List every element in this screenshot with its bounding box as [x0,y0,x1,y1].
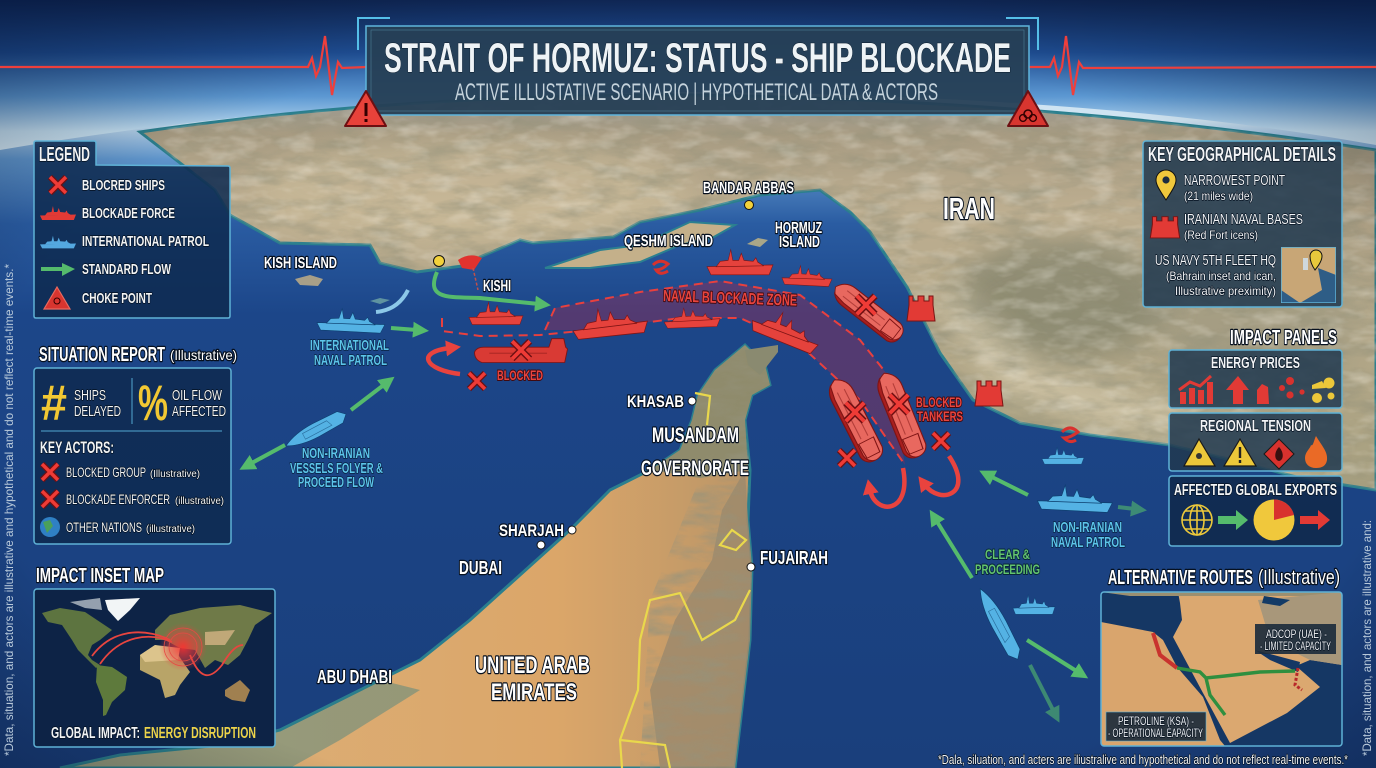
yellow borders [620,393,750,768]
panel: alternative routes inset map [1101,592,1342,746]
icon: warning triangle [345,91,386,126]
footnote: right vertical: *Data, situation, and actors are illustrative and: [1360,520,1374,756]
icon: flame [1305,436,1327,468]
heading: legend: LEGEND [39,144,90,166]
place labels: ABU DHABI [317,667,392,687]
legend: blockade force [40,205,175,222]
icon: red arrow [1300,510,1330,530]
panel: situation report [34,368,231,544]
icon: network [1279,377,1305,399]
place labels: GOVERNORATE [641,457,749,480]
legend: standard flow [41,261,172,278]
icon: fort [1150,217,1180,238]
legend: blockade force: BLOCKADE FORCE [82,205,175,222]
blocked tankers [474,278,929,466]
tag: Petroline: PETROLINE (KSA) - [1118,714,1194,728]
islands [295,222,778,375]
ship and flow labels: BLOCKED [497,367,543,383]
actor: blockade enforcer: (illustrative) [175,496,224,507]
map dots [434,200,755,571]
ship and flow labels: CLEAR & [985,546,1030,562]
icon: biohazard triangle [1008,91,1048,126]
ship and flow labels: NON-IRANIAN [302,445,370,462]
place labels: EMIRATES [491,679,577,706]
panel: regional tension: REGIONAL TENSION [1200,418,1311,435]
blue patrol ships [283,307,1113,663]
legend: international patrol [40,233,209,250]
ship and flow labels: NAVAL PATROL [1051,534,1125,551]
heading: situation report: SITUATION REPORT [39,344,165,366]
pipeline: red Sumed segment [1153,633,1177,668]
label: naval blockade zone: NAVAL BLOCKADE ZONE [663,288,798,310]
icon: globe [1182,505,1212,535]
place labels [264,180,995,706]
detail: us navy [1155,252,1276,298]
panel: energy prices: ENERGY PRICES [1211,355,1300,372]
land: UAE and Musandam [60,345,770,768]
place labels: KHASAB [627,392,684,411]
panel: regional tension [1169,413,1342,471]
actor: other nations: OTHER NATIONS [66,519,142,535]
detail: narrowest point: NARROWEST POINT [1184,172,1285,189]
forts: Iranian naval bases [907,296,1003,406]
icon: oil can [1257,384,1269,404]
place labels: FUJAIRAH [760,548,828,568]
actor: other nations [40,517,195,537]
stat: oil flow affected: AFFECTED [172,403,226,420]
subtitle: ACTIVE ILLUSTATIVE SCENARIO | HYPOTHETICAL DATA & ACTORS [455,79,938,106]
stat: oil flow affected: % [138,375,168,431]
actor: blocked group: BLOCKED GROUP [66,464,146,480]
ECG line left [0,36,367,95]
place labels: HORMUZ [775,220,822,237]
place labels: IRAN [943,191,995,226]
detail: us navy: (Bahrain inset and ican, [1166,269,1276,283]
ship and flow labels: INTERNATIONAL [310,337,389,354]
actor: blocked group: (Illustrative) [150,469,200,480]
detail: naval bases [1184,211,1303,242]
panel: key geographical details [1143,141,1342,307]
red turnaround arrows [428,348,958,507]
title panel [366,26,1029,115]
light blue curved arrow [376,290,408,312]
place labels: SHARJAH [499,521,564,540]
detail: narrowest point: (21 miles wide) [1184,189,1253,203]
legend: choke point: CHOKE POINT [82,290,152,307]
detail: us navy: US NAVY 5TH FLEET HQ [1155,252,1276,269]
stat: ships delayed: # [41,375,67,431]
icon: warning triangle [1224,439,1256,466]
heading: alternative routes: ALTERNATIVE ROUTES [1108,567,1253,589]
ship and flow labels: PROCEED FLOW [298,474,375,491]
heading: situation report: (Illustrative) [170,347,237,363]
ship and flow labels: NON-IRANIAN [1053,519,1122,536]
legend: standard flow: STANDARD FLOW [82,261,172,278]
detail: naval bases: IRANIAN NAVAL BASES [1184,211,1303,228]
panel: legend [34,141,230,318]
title frame brackets [358,18,1038,50]
heading: impact inset map: IMPACT INSET MAP [36,565,164,587]
icon: pie chart [1254,499,1294,540]
icon: pin [1156,170,1176,200]
place labels: DUBAI [459,558,502,578]
sky background [0,0,1376,175]
place labels: KISHI [483,278,511,295]
panel: energy prices [1169,350,1342,408]
red warships [469,250,833,355]
icon: rising chart [1179,376,1213,404]
detail: narrowest point [1184,172,1285,203]
stat: ships delayed [41,375,121,431]
actor: other nations: (illustrative) [146,524,195,535]
footnote: left vertical: *Data, situation, and actors are illustrative and hypothetical and do not reflect real-time events.* [2,264,16,756]
icon: up arrow [1226,376,1249,404]
place labels: UNITED ARAB [475,652,590,679]
blue ship near Iranian coast [1042,447,1084,464]
detail: naval bases: (Red Fort icens) [1184,228,1258,242]
X marks [469,296,949,466]
place labels: ISLAND [779,234,820,251]
place labels: BANDAR ABBAS [703,180,794,197]
tag: ADCOP: ADCOP (UAE) - [1266,627,1327,641]
heading: key actors: KEY ACTORS: [40,438,114,457]
caption: GLOBAL IMPACT: [51,725,140,742]
panel: impact inset map [34,589,275,747]
icon: fire diamond [1264,439,1294,469]
pipeline: Petroline green [1177,668,1295,715]
ECG line right [1028,36,1376,95]
ship and flow labels: PROCEEDING [975,561,1040,577]
blockade zone band [442,281,905,465]
place labels: KISH ISLAND [264,255,337,272]
place labels: MUSANDAM [652,424,739,447]
heading: alternative routes: (Illustrative) [1258,567,1340,589]
world map [42,598,272,716]
stat: oil flow affected [138,375,226,431]
tag: Petroline: - OPERATIONAL EAPACITY [1108,726,1203,740]
ship and flow labels: BLOCKED [916,394,962,410]
ship and flow labels: TANKERS [917,408,963,424]
stat: ships delayed: SHIPS [74,387,106,404]
ship and flow labels: VESSELS FOLYER & [290,460,383,477]
title: STRAIT OF HORMUZ: STATUS - SHIP BLOCKADE [384,34,1011,81]
icon: money [1312,378,1334,403]
place labels: QESHM ISLAND [624,233,713,250]
legend: blocked ships: BLOCRED SHIPS [82,177,165,194]
pipeline: ADCOP red [1295,668,1302,690]
legend: international patrol: INTERNATIONAL PATROL [82,233,209,250]
inset: Bahrain [1281,247,1336,303]
Kishi red base marker [458,255,482,290]
ship and flow labels: NAVAL PATROL [314,352,387,369]
stat: ships delayed: DELAYED [74,403,121,420]
icon: green arrow [1218,510,1248,530]
caption [51,725,256,742]
tag: ADCOP: - LIMITED CAPACITY [1260,639,1331,653]
legend: choke point [44,287,152,309]
legend: blocked ships [50,177,165,194]
red swirl markers [653,261,1078,442]
actor: blockade enforcer: BLOCKADE ENFORCER [66,491,170,507]
tag: ADCOP [1255,624,1336,654]
caption: ENERGY DISRUPTION [144,725,256,742]
icon: hazard triangle [1184,439,1215,466]
tag: Petroline [1106,712,1206,741]
detail: us navy: Illustrative preximity) [1175,284,1276,298]
panel: affected global exports [1169,476,1342,546]
land: Iran coast [140,94,1376,494]
stat: oil flow affected: OIL FLOW [172,387,223,404]
green flow arrows [250,272,1135,712]
ship and flow labels [290,337,1125,577]
